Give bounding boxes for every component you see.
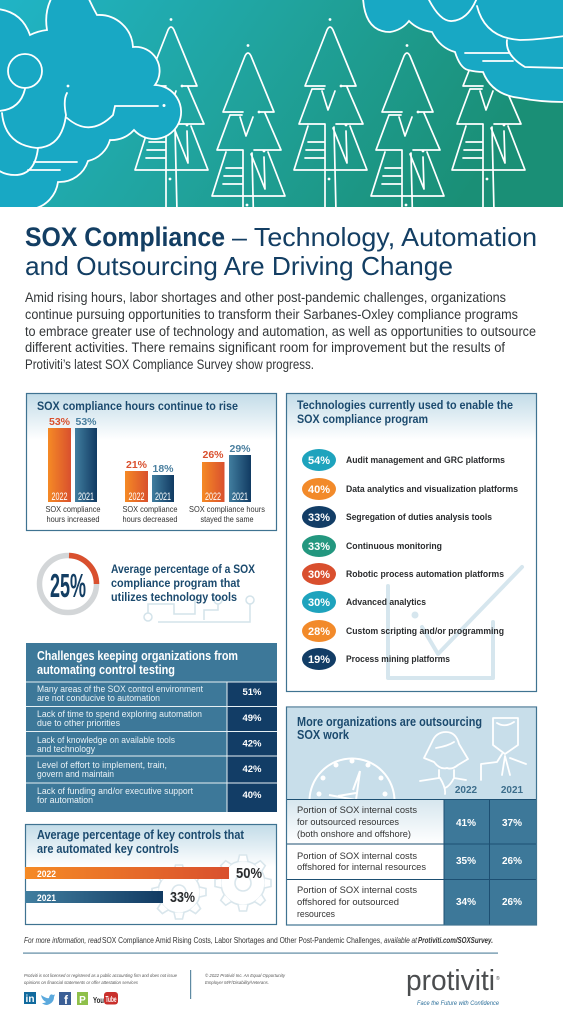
row text — [37, 684, 203, 805]
row text: are not conducive to automation — [37, 693, 160, 703]
table values — [456, 818, 522, 908]
icon: gears watermark — [152, 855, 271, 919]
bar group: hours stayed the same: 29% — [229, 443, 251, 455]
panel: outsourcing — [286, 707, 537, 925]
bar group: hours decreased — [122, 459, 178, 524]
bar group: hours stayed the same: 26% — [202, 449, 224, 461]
legal text: Employer M/F/Disability/Veterans. — [205, 980, 269, 986]
protiviti logo: Face the Future with Confidence — [417, 1000, 499, 1007]
bar group: hours increased: SOX compliance — [46, 504, 101, 514]
heading: Average percentage of key controls that — [37, 828, 245, 842]
row text: due to other priorities — [37, 718, 120, 728]
title: and Outsourcing Are Driving Change — [25, 251, 453, 281]
protiviti logo: ® — [496, 975, 500, 982]
row values: 40% — [242, 790, 262, 801]
item: 33% segregation — [302, 506, 492, 528]
bar group: hours stayed the same: 2022 — [205, 491, 221, 503]
icon: checkmark watermark — [388, 567, 522, 678]
intro paragraph: different activities. There remains significant room for improvement but the results of — [25, 340, 505, 355]
row values: 42% — [242, 738, 262, 750]
item: 19%: 19% — [308, 654, 330, 666]
icon: P badge: P — [79, 995, 86, 1006]
icon: circuit watermark — [144, 596, 254, 622]
bar: 2021 — [25, 890, 195, 906]
icon: left cloud with sun — [0, 0, 181, 209]
bar group: hours stayed the same: SOX compliance hours — [189, 504, 265, 514]
heading: SOX compliance hours continue to rise — [37, 399, 238, 413]
item: 30% robotic — [302, 563, 504, 585]
bar group: hours decreased: 21% — [126, 459, 148, 471]
table values: 41% — [456, 818, 476, 829]
row values: 42% — [242, 764, 262, 775]
bar group: hours decreased: 2022 — [128, 491, 144, 503]
item: 33% segregation: 33% — [308, 512, 330, 524]
heading — [297, 715, 482, 742]
donut stat: 25 percent: 25% — [50, 567, 86, 604]
title — [25, 222, 537, 281]
panel: SOX compliance hours — [26, 394, 276, 530]
row values: 49% — [242, 713, 262, 724]
donut caption: utilizes technology tools — [111, 592, 237, 604]
item: 40%: Data analytics and visualization platforms — [346, 484, 518, 495]
item: 54%: 54% — [308, 455, 330, 467]
row labels — [297, 805, 426, 920]
row text: govern and maintain — [37, 769, 114, 779]
bar: 2022: 2022 — [37, 869, 56, 879]
row text: Lack of time to spend exploring automation — [37, 709, 202, 719]
icon: tree 1 — [135, 18, 208, 212]
row text: Lack of funding and/or executive support — [37, 786, 193, 796]
item: 33% segregation: Segregation of duties analysis tools — [346, 512, 492, 523]
bar group: hours increased: 2022 — [52, 491, 68, 503]
icon: twitter — [41, 994, 55, 1005]
bar group: hours stayed the same: stayed the same — [200, 514, 254, 524]
title: SOX Compliance — [25, 222, 225, 252]
more information note: available at — [384, 936, 418, 945]
item: 40%: 40% — [308, 484, 330, 496]
table values: 35% — [456, 856, 476, 867]
bar group: hours decreased: 18% — [152, 463, 174, 475]
more information note: Protiviti.com/SOXSurvey. — [418, 936, 493, 945]
row text: for automation — [37, 795, 93, 805]
item: 33% continuous — [302, 535, 442, 557]
item: 30% robotic: 30% — [308, 569, 330, 581]
icon: youtube: You — [93, 995, 104, 1005]
row text: and technology — [37, 744, 95, 754]
item: 19% — [302, 648, 450, 670]
heading — [37, 649, 238, 677]
title: – Technology, Automation — [232, 222, 537, 252]
column headers — [455, 785, 524, 796]
bar group: hours increased: hours increased — [46, 514, 100, 524]
icon: clock — [308, 758, 396, 799]
bar: 2021: 33% — [170, 890, 195, 906]
intro paragraph: continue pursuing opportunities to transform their Sarbanes-Oxley compliance programs — [25, 307, 518, 322]
item: 28%: 28% — [308, 626, 330, 638]
heading: More organizations are outsourcing — [297, 715, 482, 729]
panel: technologies — [286, 394, 536, 692]
icon: tree 2 — [211, 44, 286, 207]
row labels: Portion of SOX internal costs — [297, 885, 417, 896]
table cells — [444, 799, 537, 925]
heading: SOX compliance program — [297, 412, 428, 426]
heading: SOX work — [297, 728, 349, 742]
icon: youtube — [93, 992, 118, 1005]
column headers: 2022 — [455, 785, 478, 796]
bar group: hours stayed the same: 2021 — [232, 491, 248, 503]
table values: 26% — [502, 897, 522, 908]
heading — [297, 398, 513, 426]
icon: woman — [420, 732, 468, 794]
icon: tree 4 — [370, 44, 445, 207]
panel: challenges table — [26, 643, 277, 812]
row labels: for outsourced resources — [297, 817, 399, 828]
heading: Challenges keeping organizations from — [37, 649, 238, 663]
icon: man — [481, 718, 526, 780]
icon: linkedin: in — [26, 994, 34, 1005]
item: 30% advanced: 30% — [308, 597, 330, 609]
bar group: hours decreased: SOX compliance — [122, 504, 178, 514]
bar group: hours stayed the same — [189, 443, 265, 524]
icon: facebook: f — [64, 993, 69, 1007]
panel: key controls — [25, 824, 276, 924]
bar: 2021: 2021 — [37, 893, 56, 903]
intro paragraph: to embrace greater use of technology and automation, as well as opportunities to outsource — [25, 324, 536, 339]
row labels: (both onshore and offshore) — [297, 829, 411, 840]
icon: right cloud — [363, 0, 563, 102]
legal text: © 2022 Protiviti Inc. An Equal Opportunity — [205, 972, 286, 979]
item: 30% advanced: Advanced analytics — [346, 597, 426, 608]
column headers: 2021 — [501, 785, 524, 796]
legal text — [24, 972, 286, 986]
row labels: Portion of SOX internal costs — [297, 805, 417, 816]
donut caption: Average percentage of a SOX — [111, 564, 255, 576]
bar group: hours increased: 2021 — [78, 491, 94, 503]
item: 33% continuous: Continuous monitoring — [346, 541, 442, 552]
donut stat: 25 percent — [40, 556, 96, 612]
icon: tree 5 — [451, 70, 526, 207]
item: 19%: Process mining platforms — [346, 654, 450, 665]
item: 30% advanced — [302, 591, 426, 613]
row text: Lack of knowledge on available tools — [37, 735, 175, 745]
heading: automating control testing — [37, 663, 175, 677]
table values: 26% — [502, 856, 522, 867]
bar group: hours decreased: hours decreased — [122, 514, 178, 524]
intro paragraph: Amid rising hours, labor shortages and other post-pandemic challenges, organizations — [25, 290, 506, 305]
row text: Many areas of the SOX control environment — [37, 684, 203, 694]
bar group: hours increased: 53% — [75, 416, 97, 428]
bar: 2022: 50% — [236, 866, 262, 882]
heading: Technologies currently used to enable the — [297, 398, 513, 412]
legal text: opinions on financial statements or offer attestation services — [24, 980, 139, 986]
bar: 2022 — [25, 866, 262, 882]
row labels: offshored for internal resources — [297, 862, 426, 873]
intro paragraph: Protiviti’s latest SOX Compliance Survey show progress. — [25, 357, 314, 372]
item: 28%: Custom scripting and/or programming — [346, 626, 504, 637]
protiviti logo: protiviti — [406, 965, 495, 997]
heading — [37, 828, 245, 856]
row values: 51% — [242, 687, 262, 698]
social icons — [24, 992, 118, 1007]
donut caption — [111, 564, 255, 604]
item: 33% continuous: 33% — [308, 541, 330, 553]
table values: 37% — [502, 818, 522, 829]
bar group: hours increased — [46, 416, 101, 524]
bar group: hours increased: 53% — [49, 416, 71, 428]
row values — [242, 687, 262, 801]
row labels: Portion of SOX internal costs — [297, 851, 417, 862]
more information note: For more information, read — [24, 936, 101, 945]
table values: 34% — [456, 897, 476, 908]
item: 30% robotic: Robotic process automation platforms — [346, 569, 504, 580]
legal text: Protiviti is not licensed or registered as a public accounting firm and does not issue — [24, 973, 177, 979]
row labels: resources — [297, 909, 335, 920]
item: 54%: Audit management and GRC platforms — [346, 455, 505, 466]
item: 40% — [302, 478, 518, 500]
icon: youtube: Tube — [106, 995, 117, 1004]
hero illustration — [0, 0, 563, 207]
item: 28% — [302, 620, 504, 642]
more information note: SOX Compliance Amid Rising Costs, Labor Shortages and Other Post-Pandemic Challenges, — [102, 936, 382, 945]
heading: are automated key controls — [37, 842, 179, 856]
row text: Level of effort to implement, train, — [37, 760, 167, 770]
donut caption: compliance program that — [111, 578, 240, 590]
bar group: hours decreased: 2021 — [155, 491, 171, 503]
row labels: offshored for outsourced — [297, 897, 399, 908]
intro paragraph — [25, 290, 536, 372]
item: 54% — [302, 449, 505, 471]
icon: tree 3 — [294, 18, 367, 212]
